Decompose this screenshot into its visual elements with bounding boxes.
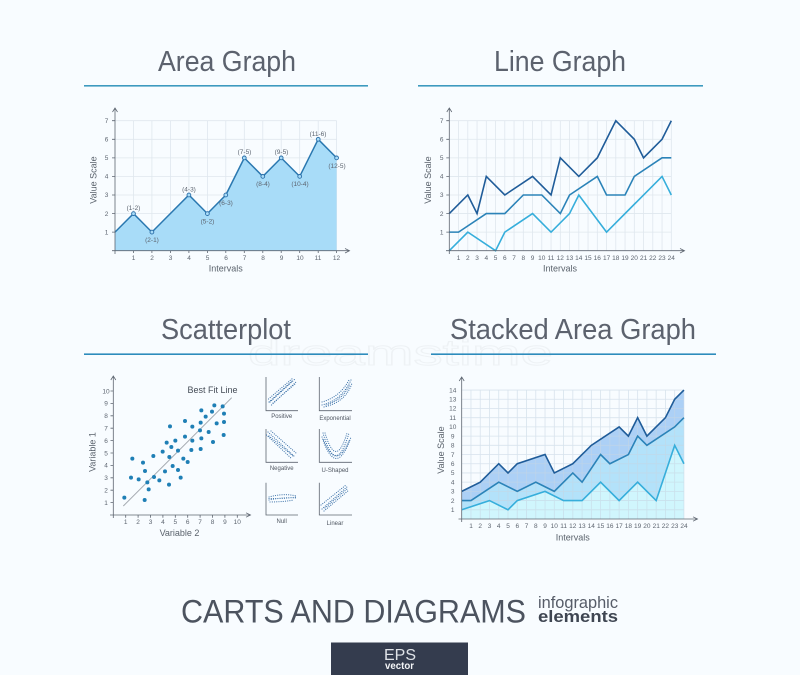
point labels: (1-2): [127, 205, 140, 212]
y axis numbers: [102, 388, 110, 507]
x axis label: Intervals: [556, 532, 590, 542]
title: area graph: Area Graph: [158, 46, 296, 78]
x axis numbers: 5: [206, 255, 210, 262]
x axis numbers: 11: [315, 255, 322, 262]
line: dark series: [449, 121, 671, 214]
mini chart: exponential: [319, 377, 352, 422]
y axis numbers: 3: [440, 192, 444, 199]
x axis numbers: 6: [503, 255, 507, 262]
x axis numbers: 5: [506, 523, 510, 530]
y axis numbers: 9: [451, 433, 455, 440]
x axis numbers: 3: [149, 519, 153, 526]
y axis numbers: 10: [449, 424, 457, 431]
y axis numbers: 8: [104, 413, 108, 420]
x axis numbers: 1: [469, 523, 473, 530]
y axis label: Value Scale: [423, 156, 433, 204]
y axis label: Value Scale: [436, 426, 446, 474]
mini chart: negative: Negative: [270, 466, 294, 472]
x axis numbers: 19: [621, 255, 629, 262]
x axis numbers: 4: [187, 255, 191, 262]
y axis numbers: 5: [105, 155, 109, 162]
x axis numbers: 15: [597, 523, 605, 530]
scatter points: [122, 403, 226, 502]
y axis numbers: 13: [449, 396, 457, 404]
line: top series: [462, 390, 684, 491]
x axis numbers: 8: [261, 255, 265, 262]
x axis numbers: 9: [223, 519, 227, 526]
y axis numbers: 6: [451, 461, 455, 468]
x axis numbers: 23: [658, 255, 666, 262]
best fit line: [123, 398, 232, 506]
y axis numbers: 3: [451, 489, 455, 496]
x axis numbers: 13: [566, 255, 574, 262]
mini chart: null: Null: [277, 519, 287, 525]
x axis numbers: 10: [551, 523, 558, 530]
x axis numbers: 1: [132, 255, 136, 262]
x axis numbers: [132, 255, 340, 262]
mini chart: u-shaped: [319, 429, 352, 474]
y axis numbers: 8: [451, 442, 455, 450]
x axis numbers: 10: [234, 519, 241, 526]
y axis numbers: 14: [449, 387, 457, 394]
x axis numbers: 2: [466, 255, 470, 262]
x axis numbers: 18: [612, 255, 620, 262]
y axis numbers: 2: [105, 211, 109, 218]
point labels: (9-5): [275, 149, 288, 156]
x axis numbers: 4: [484, 255, 488, 262]
y axis numbers: [449, 387, 457, 514]
x axis numbers: 5: [494, 255, 498, 262]
x axis numbers: 16: [594, 255, 601, 262]
x axis numbers: 8: [211, 519, 215, 526]
y axis numbers: 2: [440, 211, 444, 218]
point labels: (5-2): [201, 218, 214, 226]
y axis numbers: 12: [449, 406, 457, 413]
subtitle: infographic: infographic: [538, 593, 618, 612]
x axis numbers: 12: [557, 255, 564, 262]
heading rule: stacked area graph: [431, 353, 716, 355]
axes: [446, 108, 684, 254]
point labels: (8-4): [256, 181, 270, 188]
chart: line graph: [423, 108, 684, 274]
line: bottom series: [462, 445, 684, 510]
point labels: (4-3): [182, 186, 196, 194]
x axis numbers: [457, 255, 675, 262]
watermark: dreamstime: [248, 332, 553, 373]
x axis numbers: 3: [488, 523, 492, 530]
heading rule: area graph: [84, 85, 368, 87]
axes: [110, 376, 250, 518]
line: mid series: [449, 158, 671, 232]
x axis numbers: 4: [497, 523, 501, 530]
y axis numbers: 6: [105, 136, 109, 144]
y axis numbers: 1: [451, 507, 455, 514]
y axis numbers: 5: [104, 450, 108, 457]
mini chart: positive: [266, 377, 298, 420]
x axis numbers: 13: [578, 523, 586, 530]
band: bottom: [462, 445, 684, 519]
y axis numbers: 9: [104, 401, 108, 408]
x axis numbers: [469, 523, 688, 530]
y axis numbers: 4: [451, 479, 455, 486]
axes: [112, 108, 350, 254]
y axis numbers: 4: [104, 463, 108, 470]
x axis numbers: 20: [631, 255, 638, 262]
y axis numbers: 7: [451, 452, 455, 459]
x axis numbers: 21: [653, 523, 660, 530]
y axis numbers: 1: [104, 500, 108, 507]
x axis numbers: 3: [475, 255, 479, 262]
y axis label: Variable 1: [88, 432, 98, 472]
main title: CARTS AND DIAGRAMS: [181, 594, 526, 630]
axes: [458, 377, 698, 522]
data points: [132, 137, 338, 234]
x axis numbers: 3: [169, 255, 173, 262]
chart: area graph: [88, 108, 350, 274]
y axis numbers: 3: [105, 192, 109, 199]
band: middle: [462, 418, 684, 510]
y axis numbers: 4: [105, 174, 109, 180]
x axis numbers: 8: [534, 523, 538, 530]
x axis numbers: 5: [173, 519, 177, 526]
y axis label: Value Scale: [88, 156, 98, 204]
y axis numbers: 10: [102, 388, 110, 395]
line: light series: [449, 176, 671, 251]
x axis numbers: 22: [662, 523, 669, 530]
badge: EPS vector: EPS: [384, 647, 416, 664]
x axis numbers: 1: [124, 519, 128, 526]
mini chart: negative: [266, 429, 298, 472]
best fit label: Best Fit Line: [188, 385, 238, 395]
chart: stacked area graph: [436, 377, 698, 542]
point labels: (11-6): [310, 131, 326, 138]
x axis label: Intervals: [209, 264, 243, 274]
y axis numbers: 11: [449, 415, 456, 422]
x axis numbers: 6: [515, 523, 519, 530]
x axis numbers: 10: [538, 255, 546, 262]
y axis numbers: 7: [104, 426, 108, 432]
y axis numbers: 1: [105, 229, 109, 236]
title: stacked area graph: Stacked Area Graph: [450, 314, 696, 346]
heading rule: line graph: [418, 85, 703, 87]
mini chart: u-shaped: U-Shaped: [321, 468, 349, 474]
x axis numbers: 17: [615, 523, 623, 530]
x axis numbers: 6: [186, 519, 190, 526]
x axis numbers: 8: [521, 255, 525, 262]
subtitle: elements: elements: [538, 607, 618, 626]
x axis numbers: 11: [560, 523, 567, 530]
y axis numbers: 3: [104, 475, 108, 482]
x axis numbers: 20: [643, 523, 651, 530]
y axis numbers: 1: [440, 229, 444, 236]
x axis numbers: 21: [640, 255, 648, 262]
y axis numbers: 2: [451, 498, 455, 505]
x axis numbers: 11: [548, 255, 555, 262]
x axis numbers: 9: [543, 523, 547, 530]
y axis numbers: 2: [104, 488, 108, 494]
x axis numbers: 1: [457, 255, 461, 262]
x axis numbers: 19: [634, 523, 642, 530]
line: middle series: [462, 418, 684, 501]
x axis numbers: 22: [649, 255, 657, 262]
x axis numbers: 2: [478, 523, 482, 530]
x axis numbers: 15: [584, 255, 592, 262]
x axis numbers: 6: [224, 255, 228, 262]
mini chart: null: [266, 483, 298, 525]
mini chart: linear: [319, 483, 352, 527]
mini chart: exponential: Exponential: [319, 416, 351, 422]
point labels: (2-1): [145, 237, 159, 244]
x axis numbers: 23: [671, 523, 679, 530]
badge: EPS vector: [331, 642, 468, 675]
x axis numbers: 7: [243, 255, 247, 262]
y axis numbers: 4: [440, 174, 444, 180]
chart: main scatterplot: [88, 376, 250, 538]
area outline: [115, 139, 337, 232]
point labels: [127, 131, 346, 244]
mini chart: positive: Positive: [271, 414, 293, 420]
point labels: (12-5): [328, 163, 346, 170]
mini chart: linear: Linear: [327, 521, 343, 527]
y axis numbers: 5: [451, 470, 455, 477]
x axis numbers: 9: [280, 255, 284, 262]
title: scatterplot: Scatterplot: [161, 314, 291, 346]
x axis numbers: 2: [150, 255, 154, 262]
x axis numbers: 12: [333, 255, 340, 262]
y axis numbers: 7: [105, 118, 109, 125]
point labels: (6-3): [219, 200, 233, 207]
x axis numbers: 7: [198, 519, 202, 526]
x axis numbers: 14: [575, 255, 583, 262]
x axis numbers: 7: [512, 255, 516, 262]
y axis numbers: 7: [440, 118, 444, 125]
badge: EPS vector: vector: [385, 660, 414, 672]
x axis numbers: 17: [603, 255, 611, 262]
x axis numbers: 24: [668, 255, 675, 262]
x axis numbers: 16: [606, 523, 614, 530]
y axis numbers: [105, 118, 109, 236]
title: line graph: Line Graph: [494, 46, 626, 78]
x axis numbers: 18: [625, 523, 632, 530]
x axis label: Intervals: [543, 264, 578, 274]
y axis numbers: [440, 118, 444, 236]
x axis numbers: 7: [525, 523, 529, 530]
y axis numbers: 6: [440, 136, 444, 144]
x axis numbers: 24: [680, 523, 688, 530]
x axis numbers: 9: [531, 255, 535, 262]
x axis label: Variable 2: [160, 528, 199, 538]
y axis numbers: 5: [440, 155, 444, 162]
x axis numbers: 4: [161, 519, 165, 526]
x axis numbers: [124, 519, 241, 526]
x axis numbers: 2: [136, 519, 140, 526]
x axis numbers: 12: [569, 523, 577, 530]
band: top: [462, 390, 684, 501]
y axis numbers: 6: [104, 438, 108, 445]
heading rule: scatterplot: [84, 353, 368, 355]
x axis numbers: 10: [296, 255, 304, 262]
point labels: (7-5): [238, 149, 251, 156]
area fill: [115, 139, 337, 251]
x axis numbers: 14: [588, 523, 595, 530]
point labels: (10-4): [291, 181, 309, 188]
